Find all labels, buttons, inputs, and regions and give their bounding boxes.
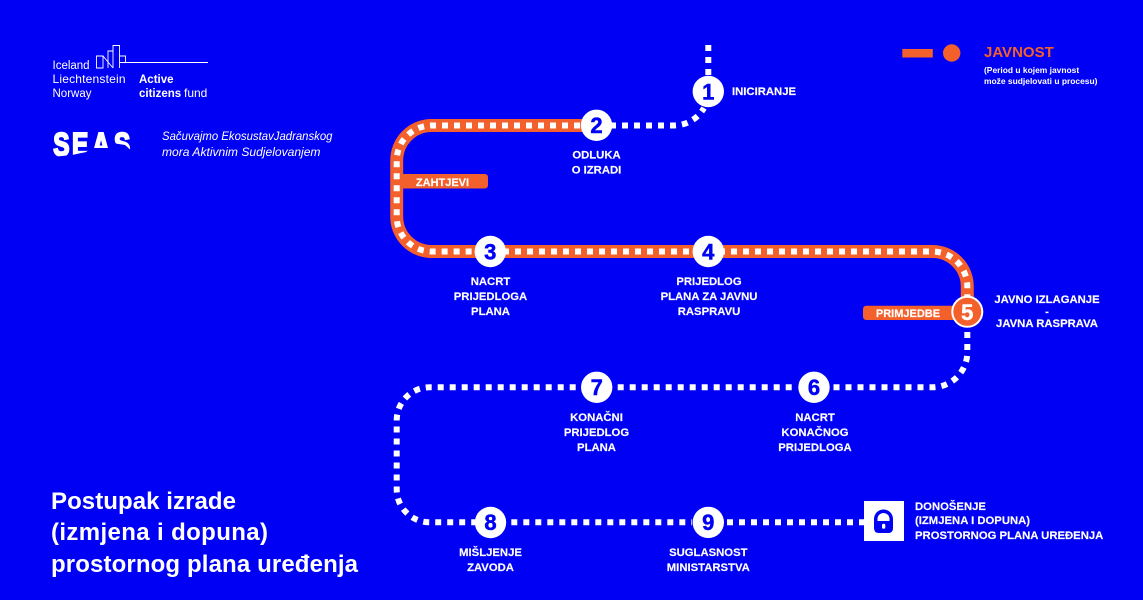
node 8: 8 xyxy=(484,510,497,535)
node 4: 4 xyxy=(702,239,715,264)
label: nacrt prijedloga plana: NACRT xyxy=(471,276,510,288)
label: konacni prijedlog plana: PLANA xyxy=(577,442,616,454)
tag: primjedbe xyxy=(863,306,967,320)
logo: Active citizens fund xyxy=(52,46,208,100)
label: nacrt prijedloga plana: PRIJEDLOGA xyxy=(454,291,527,303)
title: Postupak izrade xyxy=(51,488,236,515)
label: donosenje: PROSTORNOG PLANA UREĐENJA xyxy=(915,530,1103,542)
label: nacrt konacnog prijedloga: PRIJEDLOGA xyxy=(778,442,852,454)
label: odluka o izradi: O IZRADI xyxy=(572,164,621,176)
label: suglasnost ministarstva: SUGLASNOST xyxy=(669,547,748,559)
label: javno izlaganje xyxy=(994,294,1100,330)
node 2: 2 xyxy=(590,113,603,138)
tag: zahtjevi xyxy=(396,174,488,189)
node 1 xyxy=(693,76,724,107)
legend: javnost: JAVNOST xyxy=(984,44,1054,61)
label: misljenje zavoda: ZAVODA xyxy=(467,562,514,574)
label: konacni prijedlog plana: KONAČNI xyxy=(570,411,623,424)
label: suglasnost ministarstva xyxy=(667,547,750,574)
label: misljenje zavoda xyxy=(459,546,522,574)
logo: SEAS: SEAS xyxy=(53,127,130,163)
title: prostornog plana uređenja xyxy=(51,551,359,578)
label: nacrt konacnog prijedloga: NACRT xyxy=(795,412,835,424)
label: nacrt prijedloga plana: PLANA xyxy=(471,306,510,318)
node 6: 6 xyxy=(808,375,820,400)
legend: javnost: (Period u kojem javnost xyxy=(984,65,1079,75)
node 3 xyxy=(475,236,506,267)
SEAS tagline: mora Aktivnim Sudjelovanjem xyxy=(162,145,320,159)
tag: zahtjevi: ZAHTJEVI xyxy=(416,177,469,189)
title: (izmjena i dopuna) xyxy=(51,519,268,546)
label: konacni prijedlog plana xyxy=(564,411,629,454)
node 3: 3 xyxy=(484,239,496,264)
label: nacrt konacnog prijedloga: KONAČNOG xyxy=(781,426,849,439)
logo: Active citizens fund: fund xyxy=(184,86,207,100)
node 8 xyxy=(475,507,506,538)
node 7 xyxy=(581,372,612,403)
label: donosenje: DONOŠENJE xyxy=(915,500,986,513)
label: konacni prijedlog plana: PRIJEDLOG xyxy=(564,427,629,439)
logo: Active citizens fund: Active xyxy=(139,74,174,86)
icon: lock xyxy=(864,501,904,541)
route dots xyxy=(397,45,967,522)
tag: primjedbe: PRIMJEDBE xyxy=(876,308,940,320)
node 5: 5 xyxy=(961,300,973,325)
node 7: 7 xyxy=(591,375,603,400)
node 9: 9 xyxy=(702,510,714,535)
SEAS tagline: Sačuvajmo EkosustavJadranskog xyxy=(162,129,333,143)
label: javno izlaganje: JAVNA RASPRAVA xyxy=(996,318,1098,330)
node 9 xyxy=(693,507,724,538)
label: odluka o izradi: ODLUKA xyxy=(572,150,621,162)
label: prijedlog plana za javnu raspravu: PRIJEDLOG xyxy=(676,276,742,288)
node 2 xyxy=(581,110,612,141)
label: nacrt prijedloga plana xyxy=(454,276,527,318)
legend: javnost: može sudjelovati u procesu) xyxy=(984,76,1098,86)
label: donosenje: (IZMJENA I DOPUNA) xyxy=(915,515,1030,527)
legend: javnost xyxy=(902,44,1098,86)
node 6 xyxy=(798,372,830,403)
node 5 xyxy=(952,297,982,327)
node 4 xyxy=(693,236,724,267)
label: iniciranje: INICIRANJE xyxy=(732,86,796,98)
label: prijedlog plana za javnu raspravu: PLANA ZA JAVNU xyxy=(661,291,757,303)
title xyxy=(51,488,359,578)
SEAS tagline xyxy=(162,129,333,159)
logo: Active citizens fund: citizens xyxy=(139,88,181,100)
label: donosenje xyxy=(915,500,1103,542)
label: prijedlog plana za javnu raspravu: RASPRAVU xyxy=(678,306,740,318)
label: prijedlog plana za javnu raspravu xyxy=(661,276,757,318)
label: misljenje zavoda: MIŠLJENJE xyxy=(459,546,522,559)
logo: Active citizens fund: Iceland xyxy=(52,60,90,72)
label: javno izlaganje: JAVNO IZLAGANJE xyxy=(994,294,1100,306)
label: javno izlaganje: - xyxy=(1045,306,1049,318)
node 1: 1 xyxy=(702,79,714,104)
logo: Active citizens fund: Norway xyxy=(52,88,92,100)
label: suglasnost ministarstva: MINISTARSTVA xyxy=(667,562,750,574)
logo: Active citizens fund: Liechtenstein xyxy=(52,72,126,86)
label: odluka o izradi xyxy=(572,150,621,176)
label: nacrt konacnog prijedloga xyxy=(778,412,852,454)
public period route (orange) xyxy=(397,126,967,312)
